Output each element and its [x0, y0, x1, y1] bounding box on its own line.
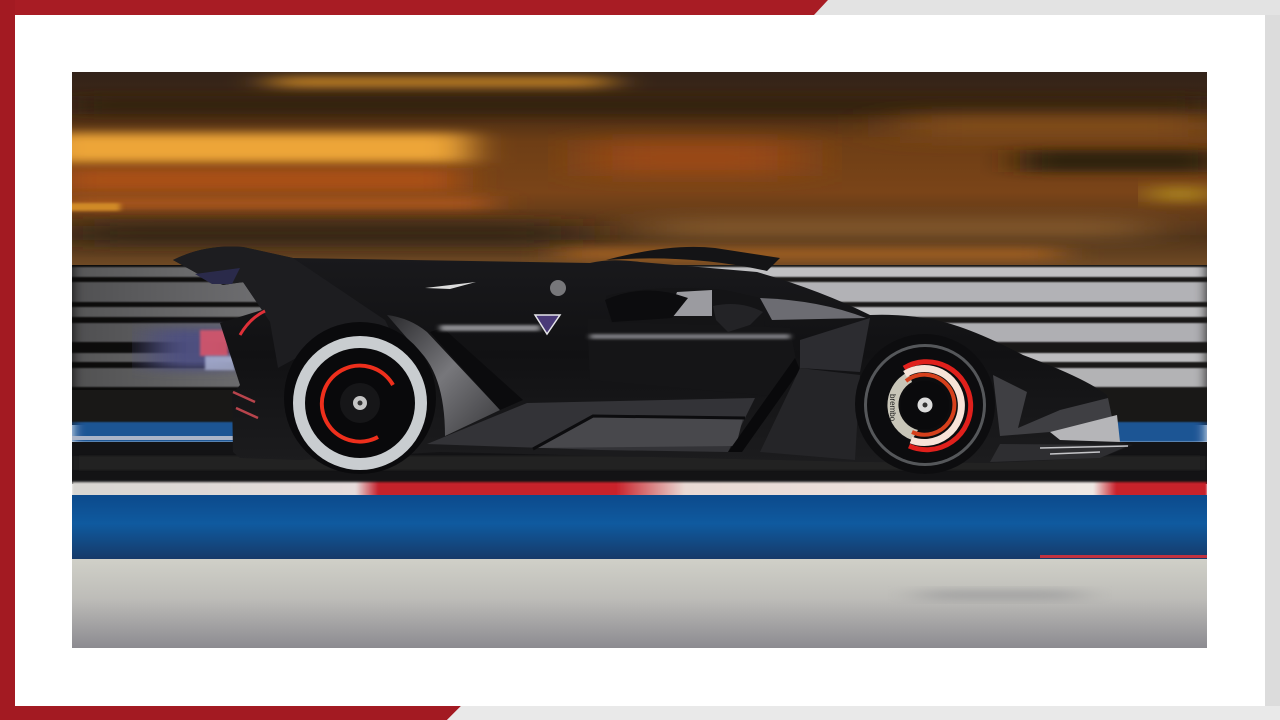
nose highlight	[1050, 415, 1120, 442]
flank highlight	[440, 325, 540, 331]
front glass	[760, 298, 866, 320]
badge	[535, 315, 560, 334]
hot disc outer ring	[904, 362, 971, 450]
side skirt lower intake	[533, 415, 743, 448]
car silhouette	[173, 247, 1133, 463]
black slash behind haunch	[430, 328, 523, 410]
wing end blue tint	[195, 268, 240, 284]
top fin	[606, 247, 780, 271]
helmet silhouette	[605, 290, 688, 322]
front arch panel	[800, 318, 870, 372]
nose intake panel	[993, 375, 1113, 436]
black front slash	[728, 358, 800, 452]
front splitter	[990, 444, 1130, 462]
front hub	[901, 381, 949, 429]
race car	[173, 247, 1133, 463]
white intake accent	[425, 282, 476, 289]
blue track band	[72, 495, 1207, 559]
window glass light patch	[668, 290, 712, 316]
splitter light lines	[1040, 446, 1128, 454]
pale asphalt foreground	[72, 559, 1207, 648]
track edge and tarmac	[72, 422, 1207, 484]
hot disc white ring	[905, 369, 961, 443]
hot disc inner ring	[906, 375, 954, 435]
front wheel	[855, 334, 995, 474]
cream brake disc	[887, 372, 918, 440]
door panel	[587, 318, 796, 396]
rear haunch highlight	[387, 315, 500, 436]
side skirt	[427, 398, 755, 452]
door highlight	[590, 334, 790, 339]
cockpit window	[606, 288, 765, 326]
photo: motion-blurred track background	[40, 72, 1220, 648]
brake disc glow	[322, 366, 393, 442]
fuel cap detail	[550, 280, 566, 296]
rear wing upright	[173, 247, 395, 368]
blurred orange lights	[40, 72, 1220, 266]
rear light blades	[240, 311, 265, 335]
side mirror	[713, 304, 763, 332]
brake caliper label: brembo	[888, 394, 897, 422]
rear hub	[340, 383, 380, 423]
lower rear diffuser light	[233, 392, 258, 418]
red and white kerb stripe	[72, 482, 1207, 497]
grey barrier stripes	[72, 265, 1207, 425]
intake dark line	[533, 416, 745, 449]
rear wheel	[284, 322, 436, 474]
